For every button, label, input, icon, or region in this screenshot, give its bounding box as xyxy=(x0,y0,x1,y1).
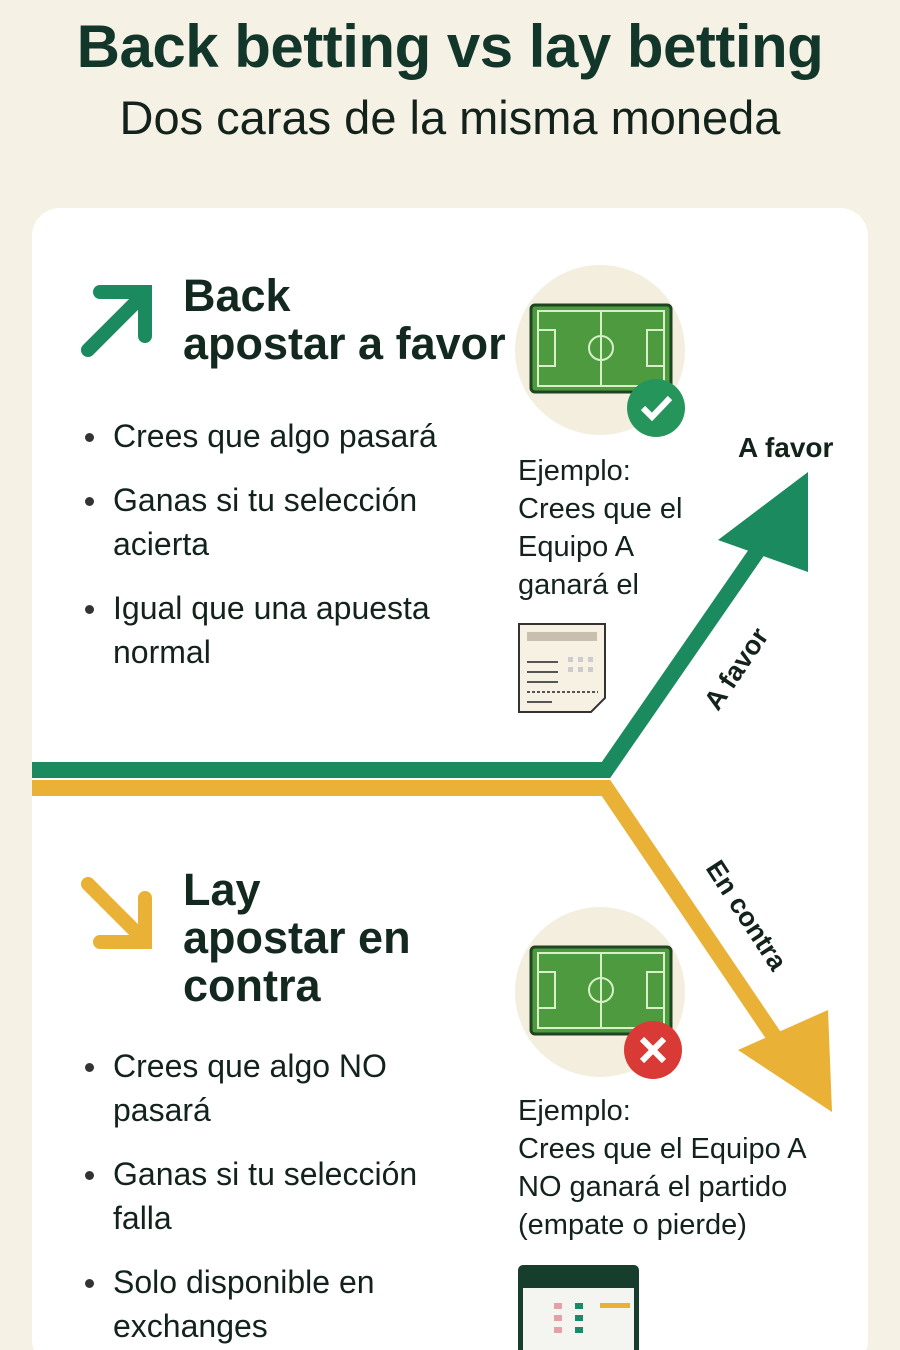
label: A favor rotated: A favor xyxy=(698,622,775,715)
example: lay: Ejemplo: xyxy=(518,1095,631,1127)
label: En contra rotated: En contra xyxy=(700,855,793,977)
subtitle: Dos caras de la misma moneda xyxy=(120,91,780,144)
heading: back: apostar a favor xyxy=(183,318,506,369)
example: back xyxy=(518,455,682,601)
panel: main card xyxy=(32,208,868,1350)
example: back: ganará el xyxy=(518,569,639,601)
example: lay: NO ganará el partido xyxy=(518,1171,787,1203)
example: back: Crees que el xyxy=(518,493,682,525)
bullets: lay: Solo disponible en exchanges xyxy=(113,1264,375,1344)
bullets: back xyxy=(85,418,437,670)
bullets: lay: Crees que algo NO pasará xyxy=(113,1048,387,1128)
icon: pitch with cross xyxy=(515,907,685,1079)
icon: pitch with check xyxy=(515,265,685,437)
icon: betting slip xyxy=(519,624,605,712)
bullets: lay xyxy=(85,1048,417,1344)
arrow: yellow lay xyxy=(32,788,832,1112)
example: lay xyxy=(518,1095,807,1241)
heading: lay: contra xyxy=(183,960,321,1011)
heading: back: Back xyxy=(183,270,291,321)
heading: lay: Lay xyxy=(183,864,261,915)
example: lay: Crees que el Equipo A xyxy=(518,1133,807,1165)
bullets: back: Igual que una apuesta normal xyxy=(113,590,430,670)
bullets: back: Ganas si tu selección acierta xyxy=(113,482,417,562)
icon: up arrow xyxy=(88,292,145,350)
example: lay: (empate o pierde) xyxy=(518,1209,747,1241)
heading: lay xyxy=(183,864,411,1011)
heading: back xyxy=(183,270,506,369)
bullets: back: Crees que algo pasará xyxy=(113,418,437,454)
icon: exchange screen xyxy=(518,1265,639,1350)
title: Back betting vs lay betting xyxy=(77,13,823,80)
heading: lay: apostar en xyxy=(183,912,411,963)
label: A favor top: A favor xyxy=(738,432,834,463)
arrow: green back xyxy=(32,472,808,770)
example: back: Ejemplo: xyxy=(518,455,631,487)
icon: down arrow xyxy=(88,884,145,942)
bullets: lay: Ganas si tu selección falla xyxy=(113,1156,417,1236)
example: back: Equipo A xyxy=(518,531,634,563)
